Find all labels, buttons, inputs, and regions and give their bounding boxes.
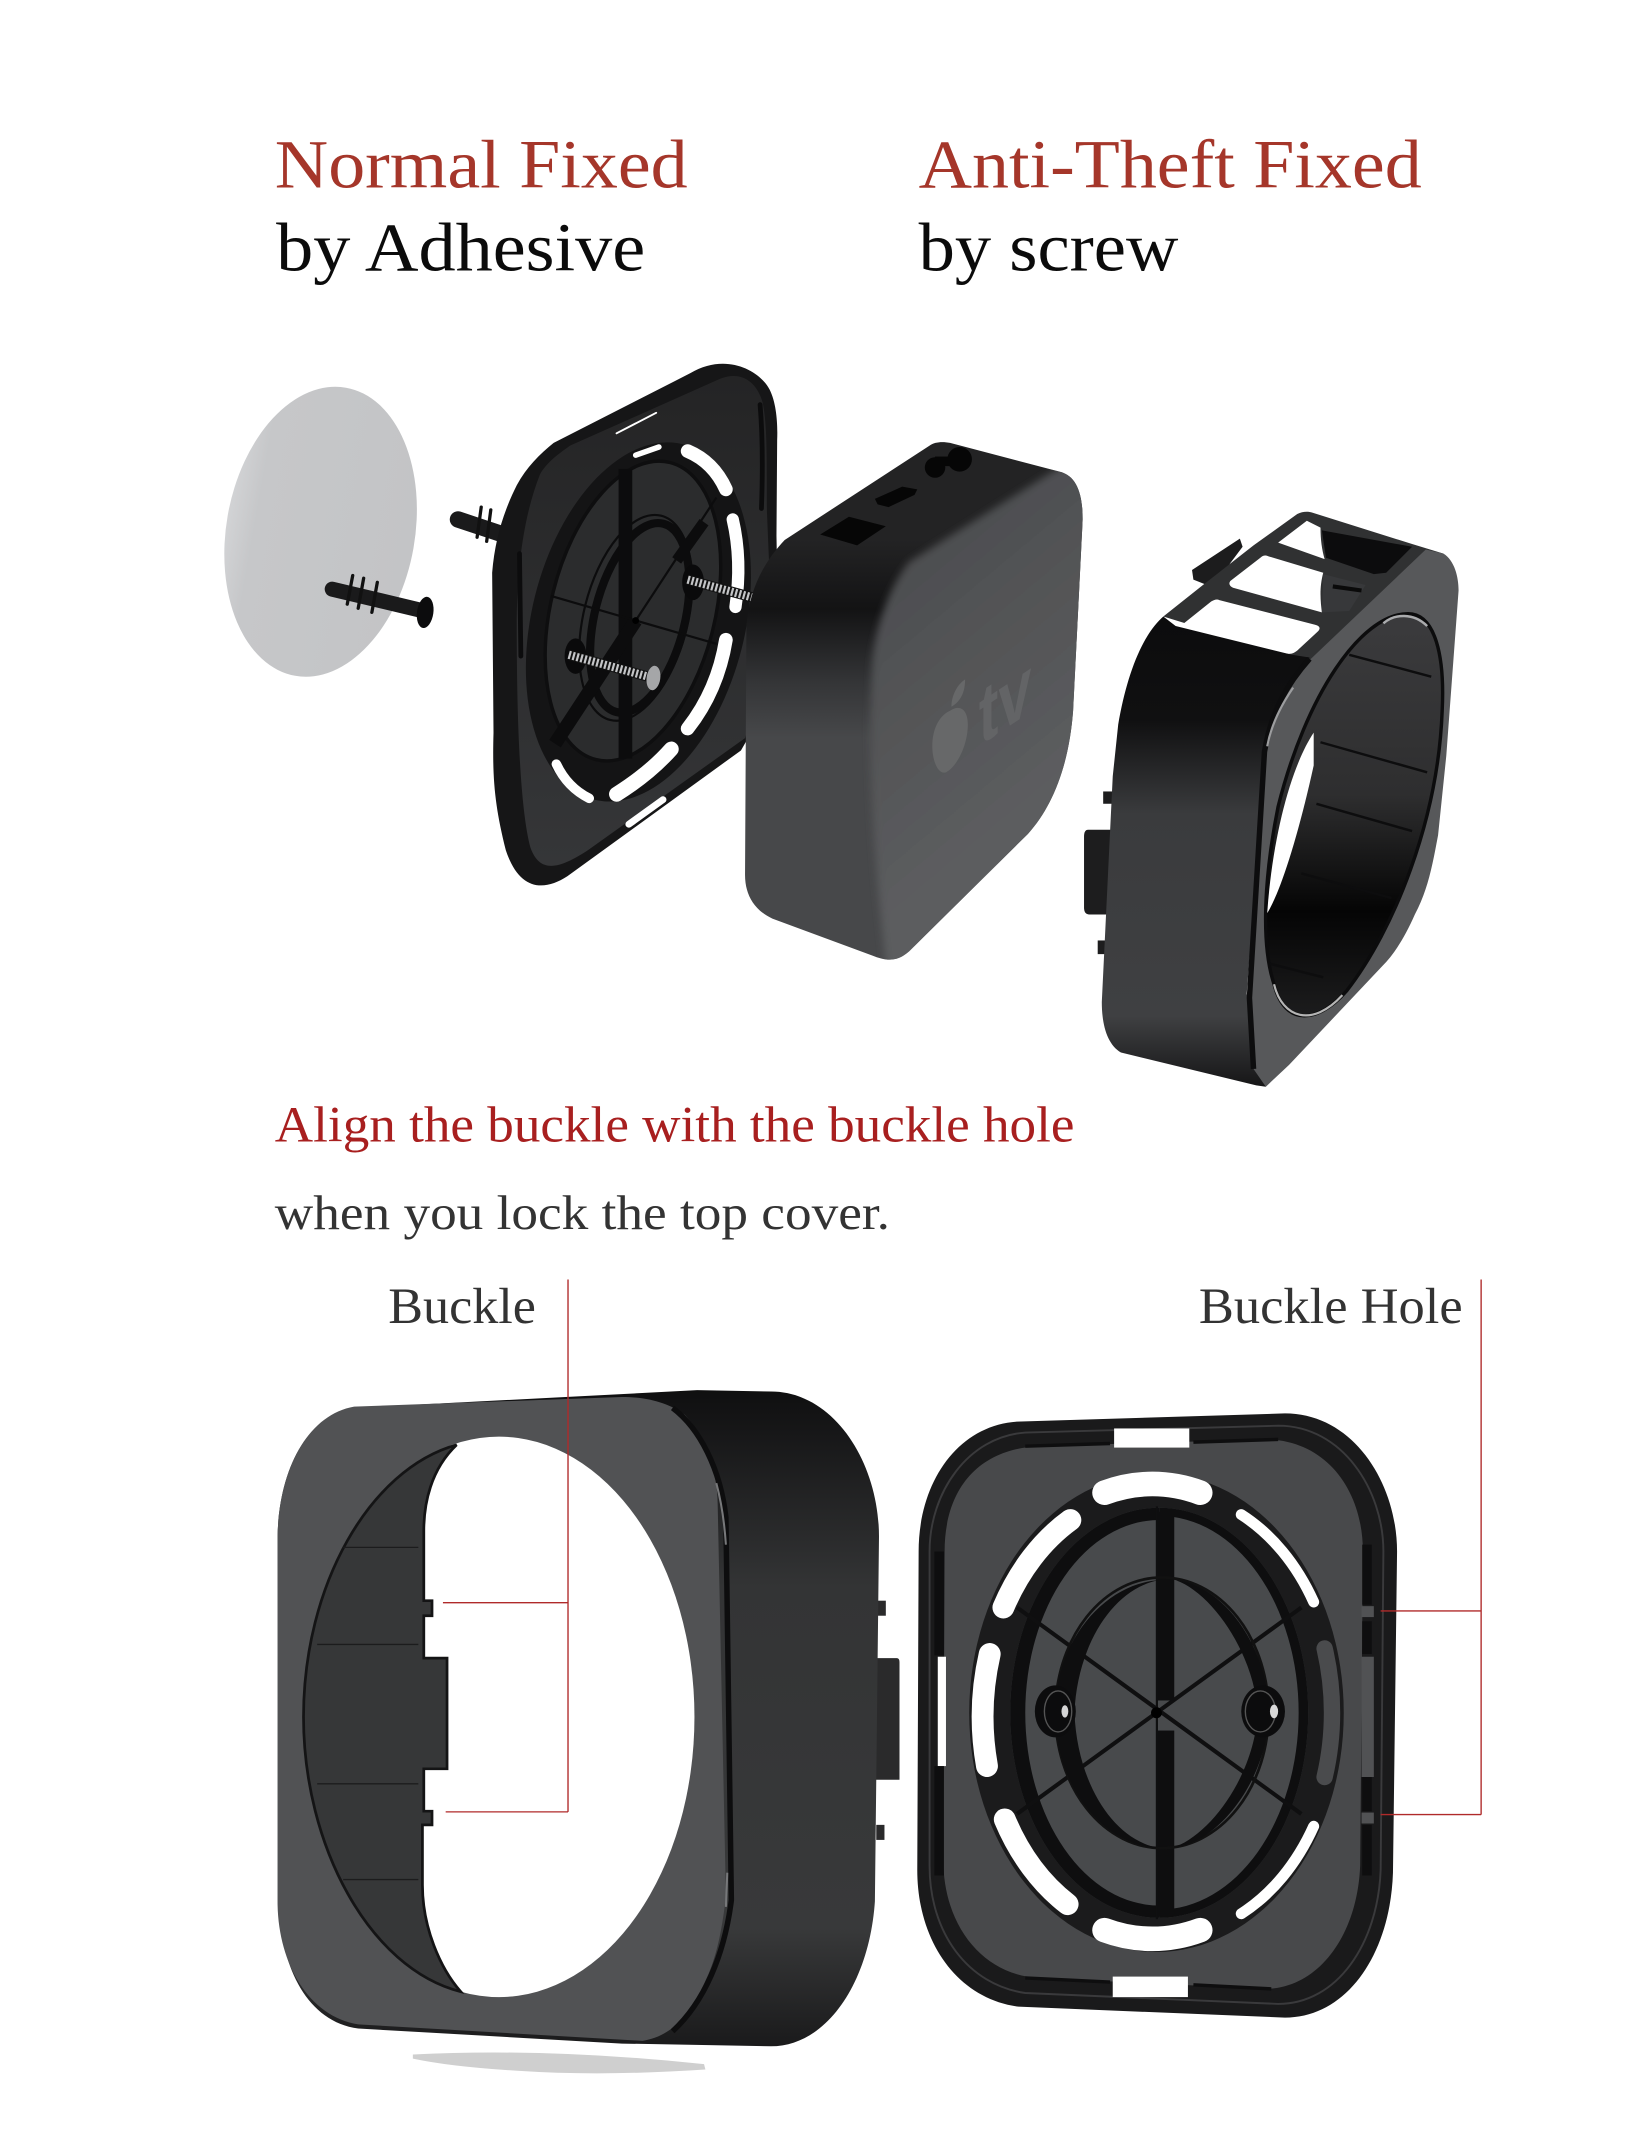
adhesive disc [202,371,439,692]
heading: normal fixed by adhesive [275,126,688,286]
slots [556,413,738,824]
wall anchor rear [458,507,503,541]
heading: anti-theft fixed by screw [919,126,1422,286]
plate panel [943,1439,1363,1989]
top frame [1163,512,1444,662]
plate rim [917,1413,1397,2018]
apple tv box [745,442,1094,984]
power port [925,447,972,478]
cover face [278,1397,726,2041]
exploded view diagram [202,364,1459,1087]
instruction: align the buckle: Align the buckle with the buckle hole [275,1096,1074,1152]
rim shadow [673,1408,731,2031]
inner wall [304,1445,461,1992]
tv wordmark: tv [979,638,1032,765]
wall anchor front [332,575,435,629]
frame window middle [1229,555,1323,612]
label: buckle: Buckle [388,1278,536,1334]
heading: normal fixed by adhesive: Normal Fixed [275,126,688,202]
spokes [1017,1608,1301,1814]
mounting screw lower [569,655,662,691]
edge notches [938,1428,1374,1997]
buckle hole leader lines [1381,1279,1481,1815]
frame window rear [1278,521,1325,559]
heading: normal fixed by adhesive: by Adhesive [276,210,645,286]
see-through area [1267,733,1314,913]
side tabs [872,1601,899,1840]
frame window front [1181,600,1320,654]
mounting screw upper [688,580,752,597]
front face [1248,550,1459,1087]
apple logo [932,679,968,773]
wall ribs [317,1547,418,1880]
screw holes [1035,1685,1285,1737]
cover front view [278,1279,899,2073]
plate rim [492,364,779,885]
base plate front view [917,1413,1397,2018]
square port [820,517,886,545]
side tabs [1084,791,1114,954]
hdmi port [875,487,917,507]
opening [304,1437,694,1997]
heading: anti-theft fixed by screw: by screw [919,210,1179,286]
instruction: lock the top cover: when you lock the top cover. [275,1185,890,1240]
hub disc [516,443,750,779]
rim highlight [1249,659,1310,1069]
inner opening [1266,614,1443,1016]
buckle leader lines [443,1279,568,1812]
base plate exploded [491,364,786,885]
hub band [969,1474,1344,1952]
inner ribs [1270,655,1431,977]
hub band [491,418,786,825]
hub inner circle and spokes [551,469,716,759]
locator tab [1192,539,1243,588]
plate panel [517,376,772,866]
label: buckle hole: Buckle Hole [1199,1278,1463,1334]
slots [983,1484,1332,1939]
inner circle [1055,1577,1269,1848]
heading: anti-theft fixed by screw: Anti-Theft Fixed [919,126,1422,202]
top cover [1084,512,1459,1087]
body [1102,616,1310,1087]
cover body [278,1390,879,2046]
ground shadow [413,2052,705,2073]
hub disc [1010,1508,1308,1918]
